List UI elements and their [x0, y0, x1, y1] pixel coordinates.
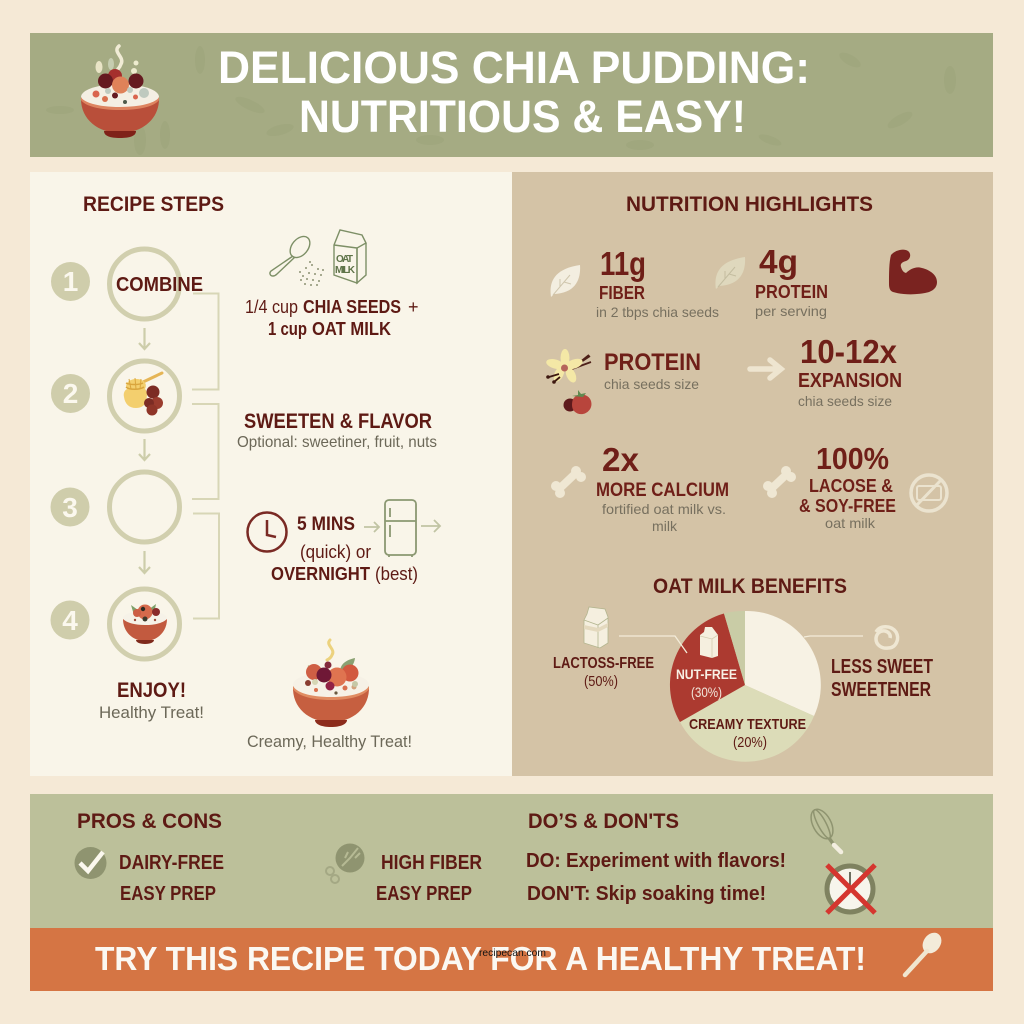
icon: check	[74, 847, 106, 879]
icon: bone	[763, 466, 796, 498]
text: ingredients: OAT MILK	[312, 319, 391, 339]
stat: protein: 4g	[759, 243, 798, 280]
list: cons: EASY PREP	[376, 883, 472, 905]
label: less sweet: SWEETENER	[831, 679, 931, 701]
icon: header bowl	[81, 46, 159, 138]
icon: small bowl	[123, 604, 167, 644]
icon: vanilla flower and berries	[545, 349, 591, 414]
icon: milk carton	[584, 607, 608, 648]
label: less sweet	[831, 656, 933, 701]
icon: spoon, seeds and oat milk carton	[270, 230, 366, 286]
text: chill times: 5 MINS	[297, 514, 355, 535]
stat: protein: per serving	[755, 303, 827, 319]
heading: nutrition highlights: NUTRITION HIGHLIGHTS	[626, 193, 873, 216]
heading: oat milk benefits: OAT MILK BENEFITS	[653, 575, 847, 598]
heading: recipe steps: RECIPE STEPS	[83, 193, 224, 216]
icon: swirl	[876, 627, 898, 648]
pie chart: CREAMY TEXTURE	[689, 716, 806, 733]
list: dos and don'ts	[526, 850, 786, 905]
icon: spoon	[905, 929, 945, 975]
stat: fiber: FIBER	[599, 283, 645, 303]
list: pros: DAIRY-FREE	[119, 852, 224, 874]
title	[218, 42, 810, 142]
text: ingredients: 1/4 cup	[245, 297, 298, 317]
heading: dos and don'ts: DO’S & DON'TS	[528, 810, 679, 833]
list: cons: HIGH FIBER	[381, 852, 482, 874]
icon: free-from symbol	[911, 475, 947, 511]
enjoy label: Healthy Treat!	[99, 703, 204, 722]
step number badges	[50, 262, 90, 640]
icon: whisk	[807, 806, 841, 852]
watermark: recipecan.com	[479, 947, 546, 959]
call to action banner	[30, 928, 993, 991]
label: lactose free: (50%)	[584, 673, 618, 690]
title: DELICIOUS CHIA PUDDING:	[218, 42, 810, 93]
text: ingredients: +	[408, 297, 419, 317]
stat: lactose and soy free: LACOSE &	[809, 476, 893, 496]
icon: white leaf	[551, 265, 580, 297]
arrow: expansion	[750, 360, 781, 378]
text: chill times: OVERNIGHT	[271, 563, 371, 584]
title: NUTRITIOUS & EASY!	[299, 91, 746, 142]
panel: pros and cons, dos and don'ts	[30, 794, 993, 928]
list: dos and don'ts: DO: Experiment with flavors!	[526, 850, 786, 872]
list: dos and don'ts: DON'T: Skip soaking time!	[527, 883, 766, 905]
stat: protein size: PROTEIN	[604, 349, 701, 376]
text: chill times	[271, 514, 418, 584]
list: cons	[376, 852, 482, 905]
step number badges: 2	[63, 378, 78, 409]
text: ingredients: CHIA SEEDS	[303, 297, 401, 317]
icon: spoon, seeds and oat milk carton: MILK	[335, 265, 356, 276]
text: sweeten and flavor: SWEETEN & FLAVOR	[244, 410, 432, 433]
stat: calcium: MORE CALCIUM	[596, 480, 729, 501]
enjoy label: ENJOY!	[117, 679, 186, 702]
icon: honey and berries	[124, 373, 163, 416]
icon: crossed-out clock	[827, 865, 875, 913]
pie chart: NUT-FREE	[676, 666, 737, 682]
stat: expansion	[798, 333, 902, 409]
label: lactose free: LACTOSS-FREE	[553, 655, 654, 672]
stat: expansion: chia seeds size	[798, 393, 892, 409]
stat: protein	[755, 243, 828, 319]
step number badges: 1	[63, 266, 78, 297]
stat: lactose and soy free: oat milk	[825, 515, 876, 531]
pie chart	[670, 611, 821, 762]
stat: protein size	[604, 349, 701, 392]
stat: calcium	[596, 441, 729, 534]
text: sweeten and flavor	[237, 410, 437, 451]
text: chill times: (best)	[375, 564, 418, 584]
label: lactose free	[553, 655, 654, 690]
leader lines	[619, 636, 863, 653]
header banner	[30, 33, 993, 157]
step 1 label: COMBINE	[116, 274, 203, 296]
connector brackets	[192, 294, 219, 618]
stat: calcium: milk	[652, 518, 678, 534]
stat: lactose and soy free: & SOY-FREE	[799, 496, 896, 516]
icon: fridge with arrows	[364, 500, 440, 557]
stat: protein size: chia seeds size	[604, 376, 699, 392]
icon: large bowl	[293, 640, 369, 727]
stat: lactose and soy free	[799, 441, 896, 531]
icon: clock	[248, 512, 286, 552]
text: ingredients	[245, 297, 419, 339]
list: pros	[119, 852, 224, 905]
stat: expansion: EXPANSION	[798, 370, 902, 392]
pie chart: (30%)	[691, 684, 722, 700]
step circles	[110, 249, 180, 659]
stat: fiber: in 2 tbps chia seeds	[596, 304, 719, 320]
stat: calcium: 2x	[602, 441, 640, 478]
icon: spoon, seeds and oat milk carton: OAT	[336, 254, 353, 265]
heading: pros and cons: PROS & CONS	[77, 810, 222, 833]
call to action text: TRY THIS RECIPE TODAY FOR A HEALTHY TREAT!	[95, 940, 866, 977]
stat: calcium: fortified oat milk vs.	[602, 501, 726, 517]
icon: flexed arm	[889, 250, 937, 294]
enjoy label	[99, 679, 204, 722]
step number badges: 3	[62, 492, 78, 523]
icon: bone	[551, 466, 586, 498]
text: chill times: (quick) or	[300, 542, 371, 562]
icon: fork and scissors	[326, 844, 364, 883]
list: pros: EASY PREP	[120, 883, 216, 905]
stat: fiber: 11g	[600, 245, 646, 282]
pie chart: (20%)	[733, 734, 767, 751]
icon: carton in pie	[700, 627, 718, 658]
text: sweeten and flavor: Optional: sweetiner, fruit, nuts	[237, 434, 437, 451]
panel: recipe steps	[30, 172, 512, 776]
flow arrows	[139, 328, 150, 573]
stat: expansion: 10-12x	[800, 333, 898, 370]
step number badges: 4	[62, 605, 78, 636]
stat: protein: PROTEIN	[755, 282, 828, 302]
caption: creamy healthy treat: Creamy, Healthy Treat!	[247, 732, 412, 751]
stat: fiber	[596, 245, 719, 320]
panel: nutrition highlights	[512, 172, 993, 776]
text: ingredients: 1 cup	[268, 319, 307, 339]
icon: pale leaf	[716, 257, 745, 289]
label: less sweet: LESS SWEET	[831, 656, 933, 678]
stat: lactose and soy free: 100%	[816, 441, 889, 476]
